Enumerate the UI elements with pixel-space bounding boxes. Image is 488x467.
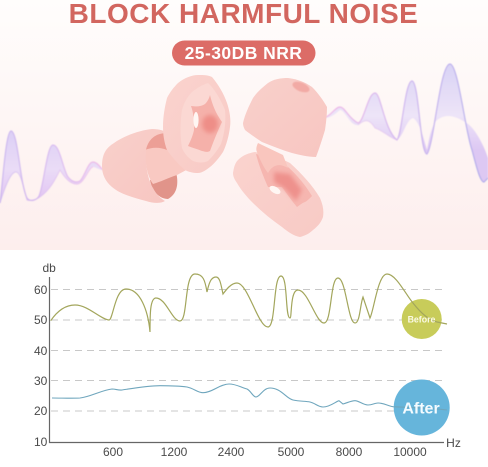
legend label: after: After: [402, 400, 440, 417]
after curve: [52, 384, 447, 410]
cap outer: [102, 129, 167, 203]
y axis labels: 50: [34, 313, 48, 327]
hole core: [202, 115, 218, 133]
chart: [34, 261, 461, 459]
axes: [50, 277, 444, 442]
cap interior top: [145, 130, 169, 156]
sound wave right: [325, 64, 488, 182]
x axis labels: 2400: [218, 445, 245, 459]
y axis labels: db: [42, 261, 56, 275]
before curve: [51, 274, 447, 332]
flange: [163, 75, 230, 173]
y axis labels: 40: [34, 344, 48, 358]
earplug right: [233, 78, 327, 237]
y axis labels: 60: [34, 283, 48, 297]
cap: [243, 78, 327, 157]
cap interior bottom: [150, 172, 177, 199]
badge: 25-30DB NRR: [172, 40, 316, 66]
sound wave left: [0, 131, 103, 203]
y axis labels: [34, 261, 56, 449]
badge: 25-30DB NRR: 25-30DB NRR: [185, 43, 302, 63]
hole light spot: [193, 112, 199, 128]
top background panel: [0, 0, 488, 250]
x axis labels: 1200: [161, 445, 188, 459]
y axis labels: 10: [34, 435, 48, 449]
legend label: before: Before: [408, 314, 436, 324]
x axis labels: 5000: [278, 445, 305, 459]
legend circle: before: [402, 299, 442, 339]
x axis labels: 600: [103, 445, 123, 459]
star-shaped hole: [188, 95, 222, 152]
x axis labels: 10000: [393, 445, 427, 459]
flange raised rim: [180, 83, 225, 162]
star core: [274, 172, 302, 201]
grid lines: [51, 290, 445, 411]
x axis labels: 8000: [336, 445, 363, 459]
legend circle: after: [394, 380, 450, 436]
x axis labels: [103, 436, 461, 459]
cap top hole: [291, 79, 311, 95]
hole light spot: [268, 184, 282, 196]
flange inner hole: [256, 154, 312, 207]
earplug left: [102, 75, 230, 203]
stem: [145, 148, 190, 184]
stem: [256, 143, 288, 173]
flange: [233, 152, 323, 237]
y axis labels: 20: [34, 404, 48, 418]
y axis labels: 30: [34, 374, 48, 388]
x axis labels: Hz: [446, 436, 461, 450]
